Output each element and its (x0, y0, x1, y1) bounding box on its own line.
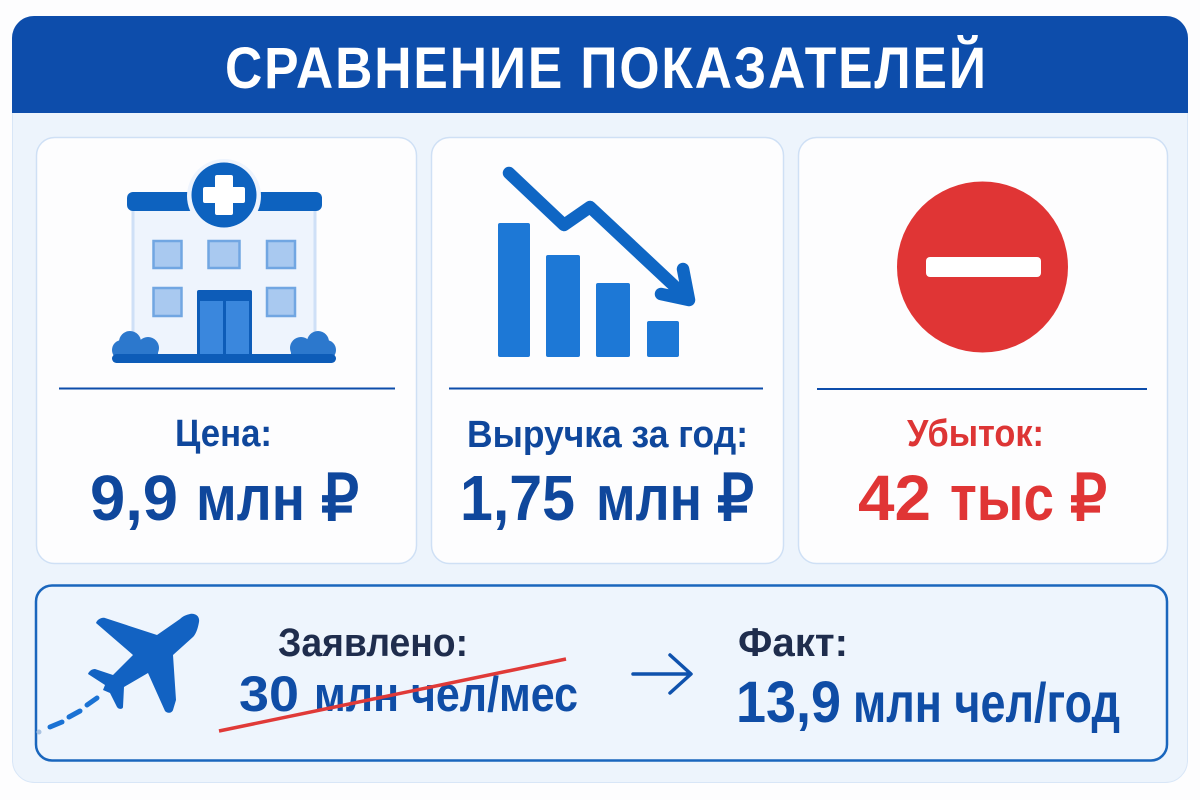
icon: no entry (897, 182, 1068, 352)
value: revenue: 1,75 (460, 462, 575, 534)
value: fact: 13,9 (736, 670, 841, 735)
value: claimed, struck through: 30 (239, 666, 299, 722)
value: fact: млн чел/год (853, 671, 1120, 734)
value: price: млн (196, 462, 305, 534)
label: price: Цена: (175, 413, 272, 455)
icon: airplane with dashed trail (36, 614, 199, 734)
arrow: claimed to fact (633, 655, 691, 693)
value: loss: 42 (858, 462, 931, 534)
value: price (90, 462, 359, 534)
panel: loss (798, 138, 1168, 564)
label: claimed: Заявлено: (278, 621, 468, 665)
icon: hospital (112, 159, 336, 363)
value: revenue: млн (596, 462, 702, 534)
title: СРАВНЕНИЕ ПОКАЗАТЕЛЕЙ (225, 34, 986, 101)
value: price: 9,9 (90, 462, 178, 534)
label: revenue: Выручка за год: (467, 414, 748, 456)
value: price: ₽ (321, 462, 359, 534)
value: revenue: ₽ (717, 462, 754, 534)
icon: falling bar chart (498, 173, 689, 357)
value: revenue (460, 462, 754, 534)
value: loss: тыс (950, 462, 1054, 534)
value: claimed, struck through (219, 659, 578, 731)
panel: price (36, 138, 416, 564)
label: fact: Факт: (738, 621, 848, 665)
panel: passengers (36, 586, 1167, 760)
value: fact (736, 670, 1120, 735)
label: loss: Убыток: (907, 413, 1044, 455)
value: loss (858, 462, 1107, 534)
value: claimed, struck through: млн чел/мес (314, 668, 578, 722)
panel: revenue (432, 138, 784, 564)
header banner (12, 16, 1188, 113)
value: loss: ₽ (1070, 462, 1107, 534)
